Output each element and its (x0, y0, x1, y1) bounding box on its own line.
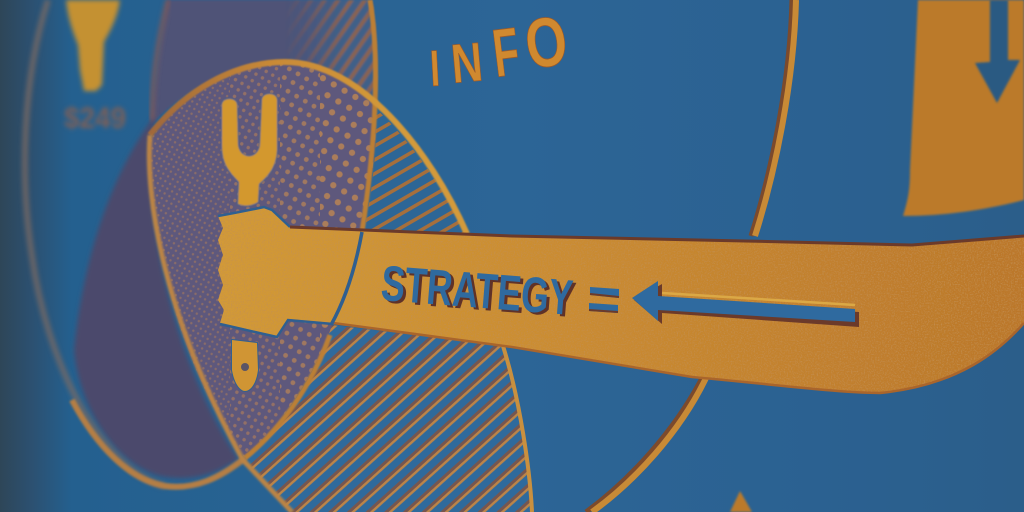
label: STRATEGY =: STRATEGY (382, 257, 578, 328)
band bottom highlight (333, 323, 1024, 393)
arc: faint outer circle left side (25, 0, 165, 486)
panel: upper purple lens (150, 0, 377, 125)
arc: lower bottom of outer circle (72, 400, 245, 487)
band top shadow (290, 227, 1024, 245)
icon: fork top of wrench (222, 94, 277, 206)
arc: big right circle upper (751, 0, 796, 236)
heading: INFO: F (489, 13, 523, 91)
arc: big right circle lower (586, 378, 706, 512)
arc: main circle through lens (245, 0, 376, 458)
caption under bulb: $249 (64, 102, 126, 135)
arc: main ellipse top (150, 62, 467, 234)
hatch: upper lens right side (295, 0, 374, 95)
icon: bottom orange triangle (730, 491, 752, 512)
equals sign (589, 287, 619, 313)
label: STRATEGY =: STRATEGY (379, 255, 575, 326)
icon: wrench handle in hand with strategy band (218, 207, 1024, 393)
line across hand and band (331, 232, 362, 325)
panel: centre dotted lens (150, 64, 376, 457)
panel: top-right orange shape (903, 0, 1024, 216)
icon: down arrow in top-right shape (975, 0, 1020, 103)
panel: lower hatch (245, 325, 533, 512)
arc: main ellipse left side (149, 135, 292, 512)
arc: main ellipse lower right (503, 346, 532, 512)
icon: light bulb (66, 0, 120, 91)
heading: INFO: O (520, 2, 572, 85)
heading: INFO: I (429, 40, 441, 98)
panel: lower-left dark purple lens (74, 113, 238, 478)
arrow pointing to strategy (632, 281, 859, 327)
icon: wrench lower tip (232, 340, 258, 391)
heading: INFO (429, 2, 572, 98)
heading: INFO: N (449, 30, 485, 95)
hand outline shadow (218, 207, 333, 337)
panel: upper right hatch (364, 108, 467, 234)
arc: upper lens left edge (152, 0, 168, 120)
